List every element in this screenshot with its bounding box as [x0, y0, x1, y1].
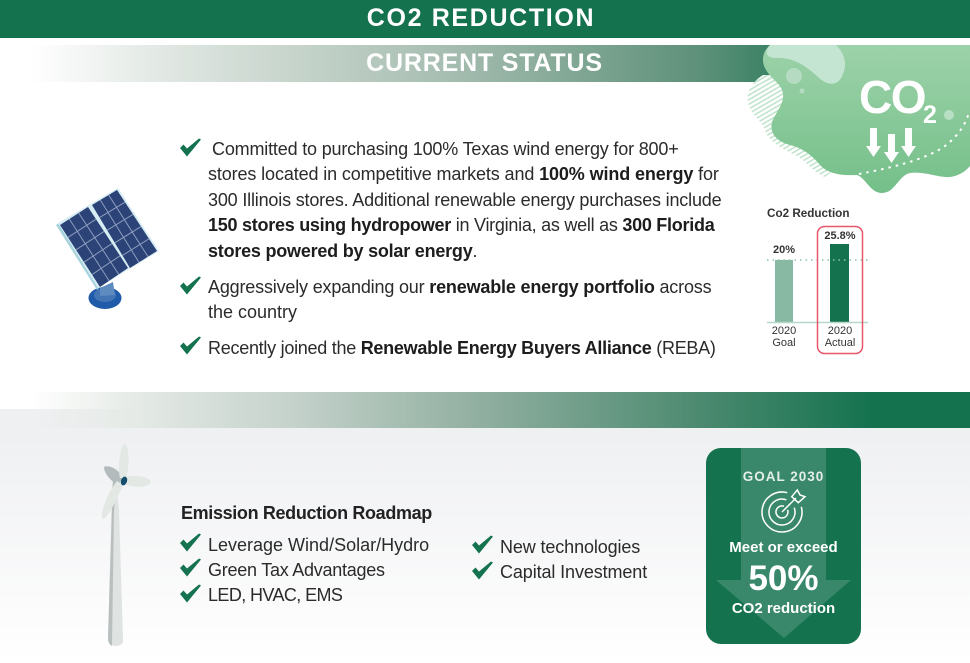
text block: bullet 1: Committed to purchasing 100% Texas wind energy for 800+ — [212, 139, 679, 159]
text block: bullet 2: Aggressively expanding our renewable energy portfolio across — [208, 277, 711, 297]
roadmap list: left column: Green Tax Advantages — [208, 560, 385, 580]
text block: bullet 1: stores powered by solar energy. — [208, 241, 477, 261]
text block: bullet 1: 300 Illinois stores. Additional renewable energy purchases include — [208, 190, 721, 210]
callout: goal 2030 — [706, 448, 861, 644]
icon: solar panel — [56, 188, 159, 309]
lower section background — [0, 409, 970, 663]
roadmap list: left column: LED, HVAC, EMS — [208, 585, 342, 605]
section divider gradient band — [0, 392, 970, 428]
heading: current status — [0, 45, 970, 82]
title bar — [0, 0, 970, 38]
heading: emission reduction roadmap: Emission Reduction Roadmap — [181, 503, 432, 523]
callout: goal 2030: CO2 reduction — [732, 600, 835, 617]
illustration: CO2 blob — [748, 45, 970, 193]
bar chart: Co2 reduction: 2020 — [828, 325, 852, 337]
roadmap list: left column: Leverage Wind/Solar/Hydro — [208, 535, 429, 555]
checkmark icons: top list — [180, 138, 201, 354]
bar chart: Co2 reduction: Co2 Reduction — [767, 207, 849, 220]
roadmap list: right column: Capital Investment — [500, 562, 647, 582]
roadmap list: left column — [208, 535, 429, 605]
title bar: CO2 REDUCTION — [367, 4, 595, 32]
callout: goal 2030: 50% — [748, 559, 819, 598]
roadmap list: right column: New technologies — [500, 537, 640, 557]
bar chart: Co2 reduction: 2020 — [772, 325, 796, 337]
text block: bullet 3: Recently joined the Renewable Energy Buyers Alliance (REBA) — [208, 338, 716, 358]
bar chart: Co2 reduction: 25.8% — [824, 230, 856, 242]
text block: bullet 1: 150 stores using hydropower in Virginia, as well as 300 Florida — [208, 215, 714, 235]
text block: bullet 2 — [208, 277, 711, 322]
callout: goal 2030: GOAL 2030 — [743, 469, 824, 484]
text block: bullet 1 — [208, 139, 721, 261]
roadmap list: right column — [500, 537, 648, 582]
bar chart: Co2 reduction — [767, 207, 868, 354]
bar chart: Co2 reduction: Goal — [772, 337, 796, 349]
illustration: CO2 blob: CO — [859, 71, 925, 123]
heading: current status: CURRENT STATUS — [366, 49, 603, 77]
text block: bullet 2: the country — [208, 302, 297, 322]
bar chart: Co2 reduction: Actual — [825, 337, 855, 349]
text block: bullet 1: stores located in competitive markets and 100% wind energy for — [208, 164, 719, 184]
callout: goal 2030: Meet or exceed — [729, 539, 838, 556]
bar chart: Co2 reduction: 20% — [773, 244, 795, 256]
illustration: CO2 blob: 2 — [923, 101, 937, 129]
